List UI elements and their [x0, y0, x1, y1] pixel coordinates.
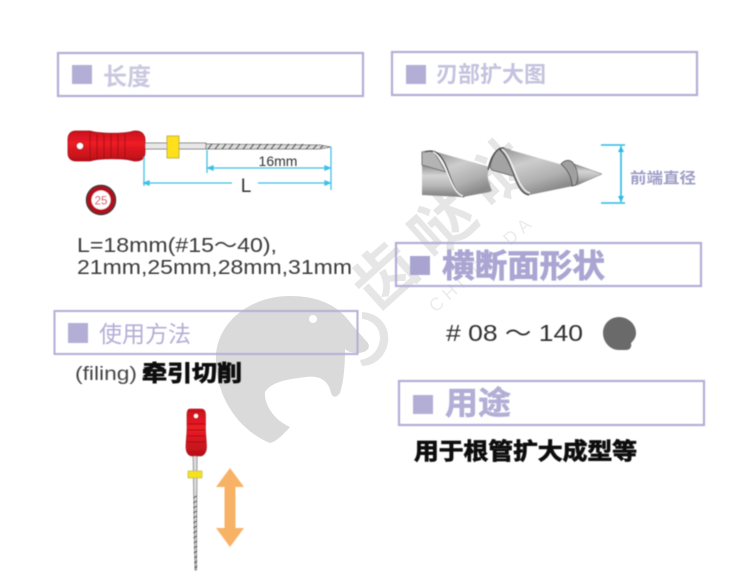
panel: blade enlargement heading: [392, 52, 697, 95]
figure: file with length dimensions: [68, 131, 331, 197]
blade: [206, 144, 331, 149]
text: available lengths: L=18mm(#15～40),: [77, 235, 277, 257]
panel: cross-section heading: [396, 243, 701, 286]
panel: usage method heading: 使用方法: [99, 321, 191, 347]
panel: usage heading: 用途: [445, 385, 511, 421]
dimension lines: [144, 147, 331, 190]
text: available lengths: [77, 235, 352, 279]
watermark: brand text: 齿哒哒: [339, 117, 557, 323]
text: size range: # 08 ～ 140: [446, 320, 583, 346]
icon: size 25 ring: [86, 186, 116, 214]
file shaft: [143, 143, 206, 149]
panel: usage heading: [399, 381, 704, 425]
icon: size 25 ring: 25: [95, 196, 107, 208]
label: L: L: [241, 176, 251, 197]
text: purpose: 用于根管扩大成型等: [414, 438, 637, 464]
red handle: [68, 131, 145, 161]
panel: cross-section heading: 横断面形状: [442, 248, 605, 284]
dimension: tip diameter: 前端直径: [630, 169, 696, 187]
figure: vertical file: [186, 409, 206, 570]
icon: cross-section shape: [603, 317, 636, 350]
panel: blade enlargement heading: 刃部扩大图: [436, 62, 546, 87]
panel: length heading: [58, 53, 363, 96]
yellow stopper: [188, 471, 202, 478]
figure: blade enlarged drawing: [422, 148, 602, 197]
text: available lengths: 21mm,25mm,28mm,31mm: [77, 257, 352, 279]
panel: length heading: 长度: [103, 64, 151, 91]
arrow: up and down motion: [216, 468, 244, 547]
panel: usage method heading: [54, 311, 358, 354]
text: filing motion: 牵引切削: [142, 361, 242, 386]
watermark: brand text: CHI DA DA: [425, 211, 539, 316]
dimension: tip diameter: [601, 145, 696, 203]
watermark: elephant: [216, 296, 388, 443]
text: filing motion: (filing): [75, 364, 137, 385]
yellow stopper: [167, 136, 179, 158]
red handle: [186, 409, 206, 456]
text: filing motion: [75, 361, 242, 386]
label: 16mm: 16mm: [259, 153, 297, 169]
